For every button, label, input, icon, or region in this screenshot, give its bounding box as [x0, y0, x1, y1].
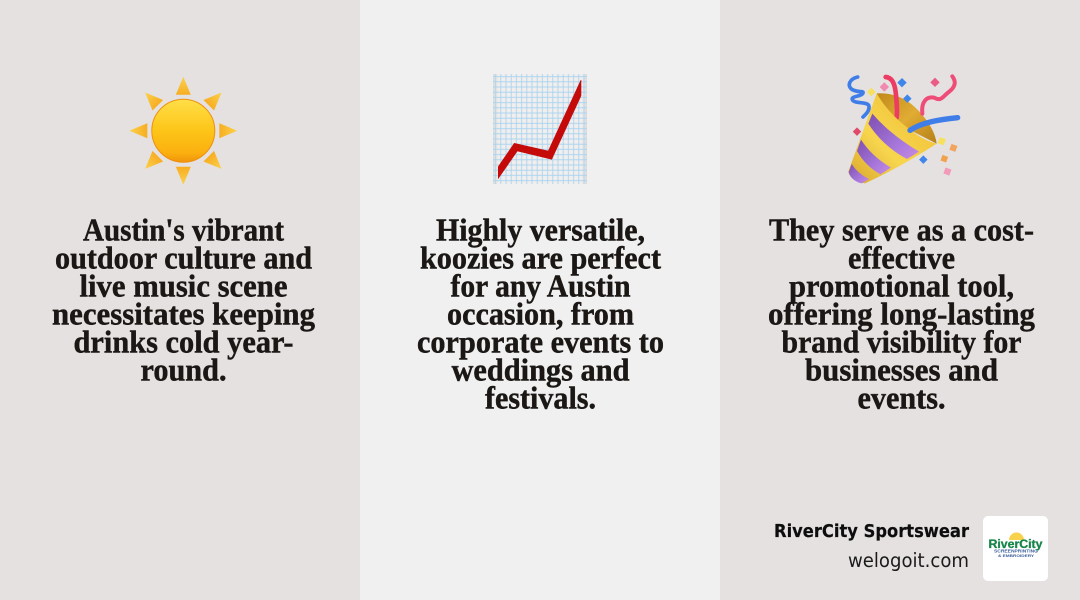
heading: right panel text: promotional tool,: [789, 268, 1014, 304]
heading: right panel text: [768, 212, 1035, 416]
heading: left panel text: live music scene: [80, 268, 288, 304]
heading: middle panel text: weddings and: [452, 352, 630, 388]
icon: party popper: [848, 76, 958, 183]
icon: sun: [129, 77, 237, 185]
panel: middle background: [360, 0, 720, 600]
heading: right panel text: businesses and: [805, 352, 998, 388]
heading: right panel text: brand visibility for: [782, 324, 1022, 360]
heading: left panel text: round.: [140, 352, 226, 388]
heading: right panel text: events.: [858, 380, 946, 416]
heading: left panel text: Austin's vibrant: [83, 212, 284, 248]
heading: middle panel text: koozies are perfect: [420, 240, 661, 276]
logo badge: RiverCity: [988, 539, 1043, 551]
icon: rising chart: [493, 74, 587, 184]
heading: right panel text: offering long-lasting: [768, 296, 1035, 332]
heading: middle panel text: corporate events to: [417, 324, 664, 360]
heading: middle panel text: festivals.: [485, 380, 596, 416]
heading: middle panel text: [417, 212, 664, 416]
heading: left panel text: [52, 212, 315, 388]
heading: left panel text: outdoor culture and: [55, 240, 312, 276]
website: welogoit.com: [848, 549, 969, 572]
heading: left panel text: drinks cold year-: [74, 324, 294, 360]
brand name: RiverCity Sportswear: [774, 521, 969, 542]
panel: right background: [720, 0, 1080, 600]
heading: middle panel text: Highly versatile,: [436, 212, 645, 248]
logo badge: & EMBROIDERY: [998, 553, 1034, 558]
heading: right panel text: effective: [848, 240, 955, 276]
heading: middle panel text: occasion, from: [447, 296, 634, 332]
confetti: [897, 78, 907, 87]
logo badge: SCREENPRINTING: [994, 548, 1039, 554]
logo badge: [983, 516, 1048, 581]
panel: left background: [0, 0, 360, 600]
heading: left panel text: necessitates keeping: [52, 296, 315, 332]
heading: middle panel text: for any Austin: [450, 268, 631, 304]
heading: right panel text: They serve as a cost-: [769, 212, 1034, 248]
